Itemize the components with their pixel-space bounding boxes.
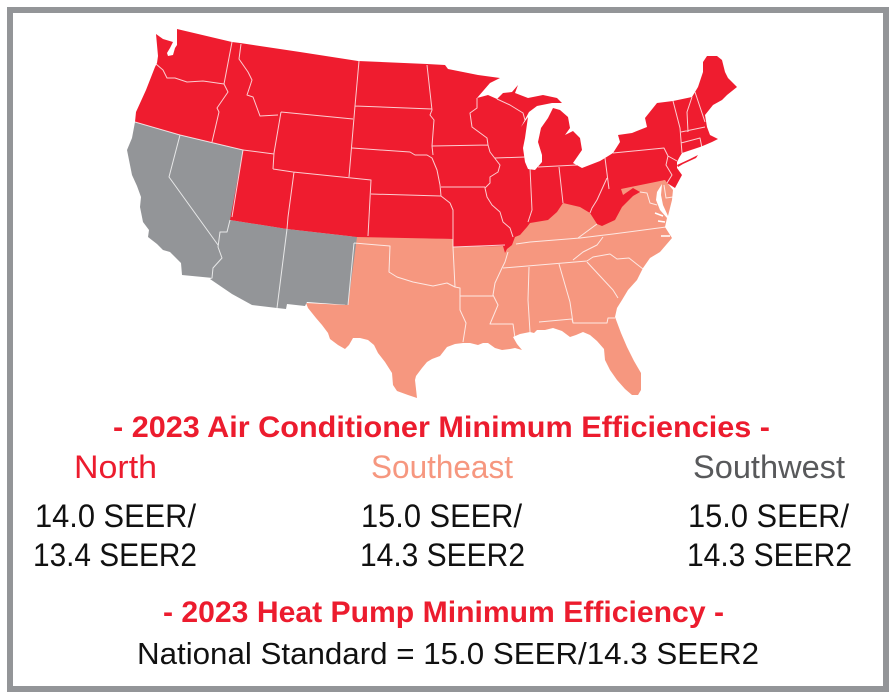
label: North: North [74,449,157,485]
southwest borders [135,122,287,308]
value: North SEER2: 13.4 SEER2 [33,537,197,573]
island: Long Island [677,155,698,167]
region: southeast [306,180,673,398]
region: north [135,29,737,253]
heading: heat pump minimum: - 2023 Heat Pump Minimum Efficiency - [163,596,724,629]
column: Southwest [687,449,852,573]
value: Southeast SEER2: 14.3 SEER2 [360,537,525,573]
value: North SEER: 14.0 SEER/ [35,498,196,534]
state borders [135,42,705,342]
south borders [348,185,673,342]
label: Southeast: Southeast [371,449,513,485]
text: national standard: National Standard = 15.0 SEER/14.3 SEER2 [137,636,759,671]
value: Southeast SEER: 15.0 SEER/ [361,498,522,534]
inlets: Chesapeake tributaries [655,213,670,236]
label: Southwest: Southwest [693,449,845,485]
north borders [156,42,705,247]
value: Southwest SEER: 15.0 SEER/ [688,498,849,534]
map: US regions [127,29,737,398]
heading: air conditioner minimums: - 2023 Air Conditioner Minimum Efficiencies - [113,411,770,444]
column: Southeast [360,449,525,573]
region: southwest [127,122,357,309]
value: Southwest SEER2: 14.3 SEER2 [687,537,852,573]
column: North [33,449,197,573]
